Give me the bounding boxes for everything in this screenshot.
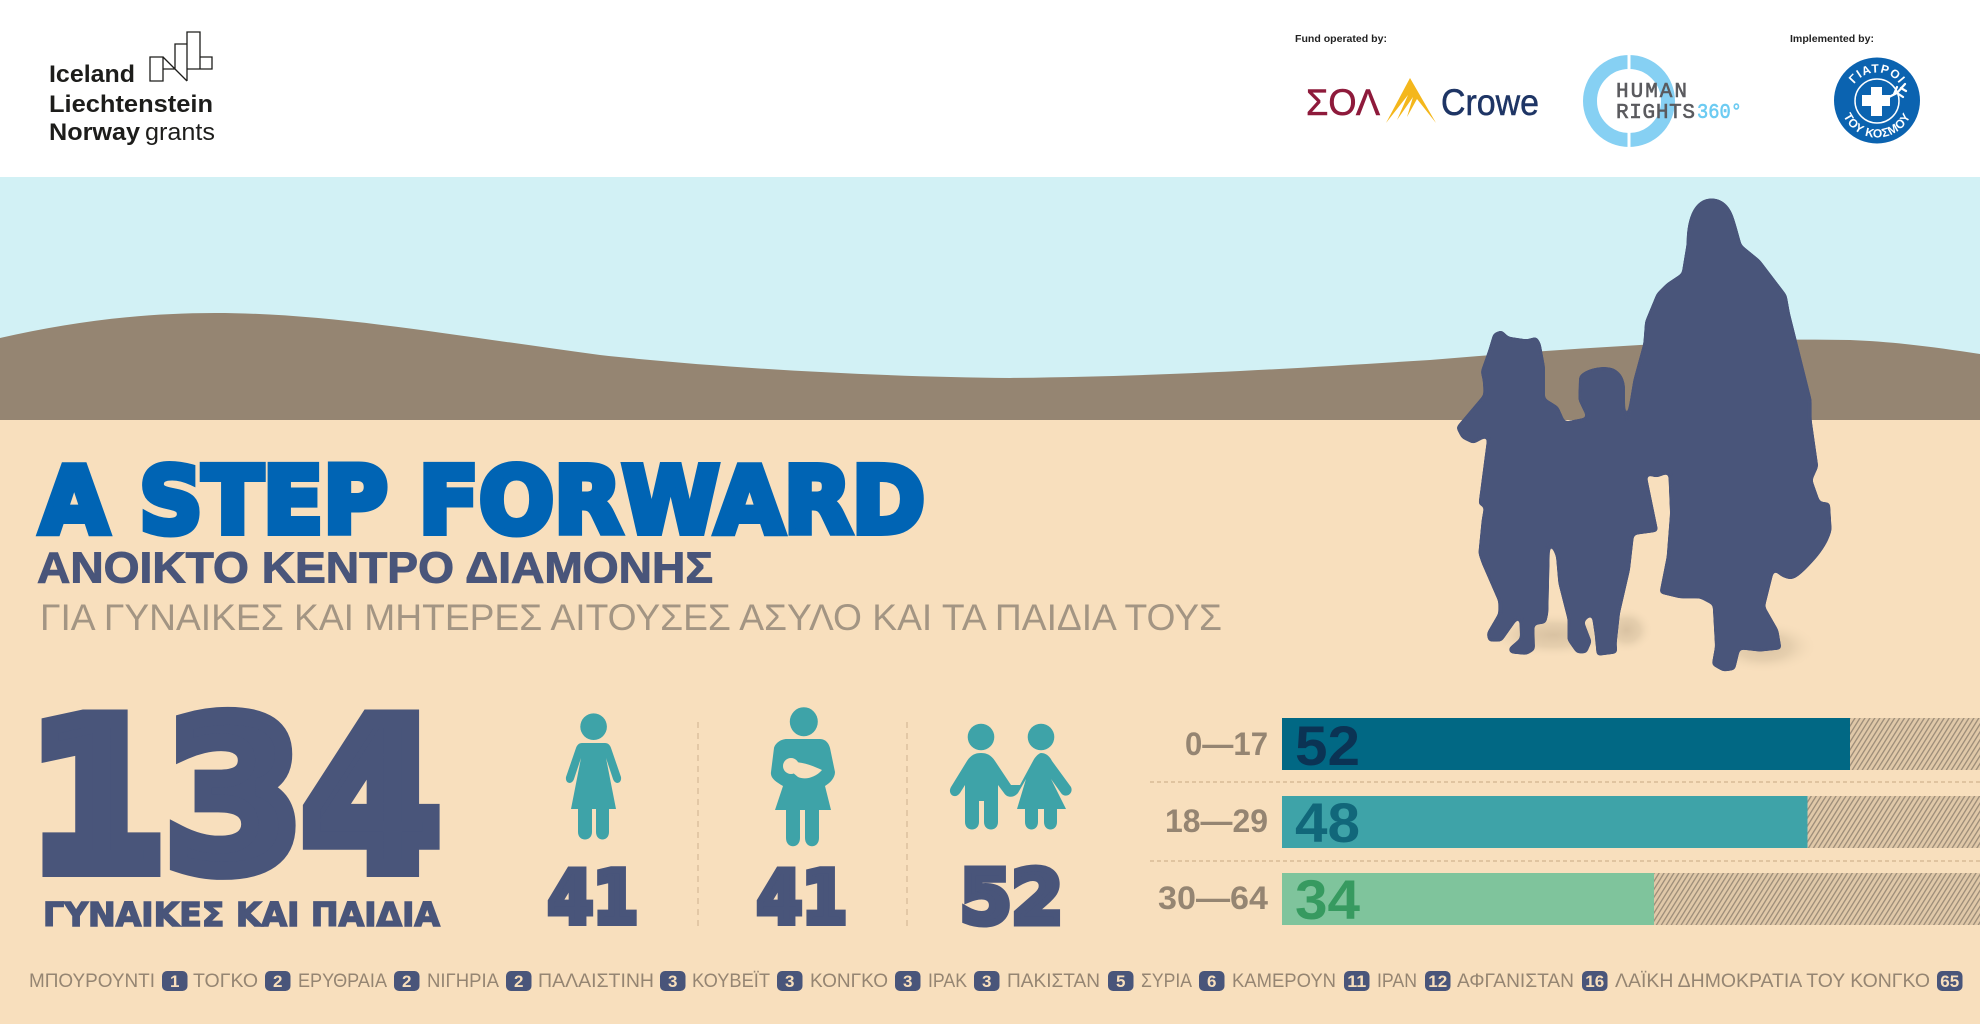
logo: Iceland Liechtenstein Norway grants — [49, 32, 215, 146]
logo: Human Rights 360: RIGHTS — [1616, 102, 1695, 125]
background: sand ground — [0, 420, 1980, 1024]
bar: 0-17: 52 — [1295, 714, 1360, 777]
footer: countries of origin: ΑΦΓΑΝΙΣΤΑΝ — [1457, 971, 1574, 992]
logo: SOL Crowe — [1306, 78, 1539, 123]
logo: Iceland Liechtenstein Norway grants: Iceland — [49, 61, 135, 88]
logo: Doctors of the World: ΓΙΑΤΡΟΙ — [1848, 64, 1905, 84]
bar: 0-17 — [1185, 714, 1980, 777]
footer: countries of origin: ΤΟΓΚΟ — [193, 971, 258, 992]
logo: Iceland Liechtenstein Norway grants: Norway — [49, 119, 141, 146]
big number: 134 total: 134 — [28, 679, 440, 917]
footer: countries of origin: 2 — [402, 972, 411, 991]
bar: 0-17: 0—17 — [1185, 726, 1268, 762]
footer: countries of origin: ΙΡΑΝ — [1377, 971, 1417, 992]
footer: countries of origin: ΠΑΛΑΙΣΤΙΝΗ — [538, 971, 654, 992]
illustration: mother and two children silhouette — [1456, 198, 1832, 673]
logo: Human Rights 360: 360° — [1697, 102, 1742, 125]
label: fund operated by: Fund operated by: — [1295, 33, 1387, 45]
footer: countries of origin: 2 — [273, 972, 282, 991]
logo: Iceland Liechtenstein Norway grants: grants — [145, 119, 215, 146]
bar: 30-64 — [1158, 868, 1980, 931]
footer: countries of origin: 2 — [514, 972, 523, 991]
stat: children 52: 52 — [960, 855, 1063, 941]
footer: countries of origin: ΣΥΡΙΑ — [1141, 971, 1192, 992]
logo: SOL Crowe: Crowe — [1441, 82, 1539, 123]
footer: countries of origin: 3 — [982, 972, 991, 991]
subtitle: open accommodation centre: ΑΝΟΙΚΤΟ ΚΕΝΤΡΟ ΔΙΑΜΟΝΗΣ — [37, 544, 713, 592]
label: implemented by: Implemented by: — [1790, 33, 1874, 45]
bar: 30-64: 34 — [1295, 868, 1360, 931]
bar: 18-29 — [1165, 791, 1980, 854]
icon: two children holding hands — [950, 724, 1072, 830]
footer: countries of origin: ΜΠΟΥΡΟΥΝΤΙ — [29, 971, 155, 992]
footer: countries of origin: 16 — [1585, 972, 1604, 991]
stat: women 41: 41 — [548, 856, 638, 940]
footer: countries of origin: ΚΟΥΒΕΪΤ — [692, 971, 770, 992]
logo: Human Rights 360: HUMAN — [1616, 81, 1687, 104]
footer: countries of origin: ΕΡΥΘΡΑΙΑ — [298, 971, 387, 992]
footer: countries of origin: ΝΙΓΗΡΙΑ — [427, 971, 499, 992]
footer: countries of origin: 3 — [785, 972, 794, 991]
header band — [0, 0, 1980, 177]
logo: Human Rights 360 — [1590, 50, 1742, 152]
footer: countries of origin: 3 — [668, 972, 677, 991]
footer: countries of origin: ΚΟΝΓΚΟ — [810, 971, 888, 992]
bar: 18-29: 48 — [1295, 791, 1360, 854]
footer: countries of origin: 5 — [1116, 972, 1125, 991]
logo: Doctors of the World — [1834, 58, 1920, 144]
footer: countries of origin: 11 — [1347, 972, 1366, 991]
background: hill — [0, 313, 1980, 421]
footer: countries of origin: 6 — [1207, 972, 1216, 991]
icon: mother holding baby — [771, 707, 835, 846]
footer: countries of origin: ΙΡΑΚ — [928, 971, 967, 992]
footer: countries of origin: ΛΑΪΚΗ ΔΗΜΟΚΡΑΤΙΑ ΤΟΥ ΚΟΝΓΚΟ — [1615, 971, 1930, 992]
logo: Doctors of the World: ΤΟΥ ΚΟΣΜΟΥ — [1844, 112, 1909, 138]
footer: countries of origin: ΚΑΜΕΡΟΥΝ — [1232, 971, 1336, 992]
footer: countries of origin: 65 — [1940, 972, 1959, 991]
subtitle: target group: ΓΙΑ ΓΥΝΑΙΚΕΣ ΚΑΙ ΜΗΤΕΡΕΣ ΑΙΤΟΥΣΕΣ ΑΣΥΛΟ ΚΑΙ ΤΑ ΠΑΙΔΙΑ ΤΟΥΣ — [40, 597, 1222, 638]
footer: countries of origin: 1 — [170, 972, 179, 991]
title: A STEP FORWARD: A STEP FORWARD — [40, 448, 925, 554]
footer: countries of origin: 3 — [903, 972, 912, 991]
bar chart: age groups — [1150, 714, 1980, 931]
label: women and children: ΓΥΝΑΙΚΕΣ ΚΑΙ ΠΑΙΔΙΑ — [43, 896, 440, 934]
footer: countries of origin — [29, 971, 1962, 992]
icon: woman — [566, 713, 621, 840]
bar: 30-64: 30—64 — [1158, 880, 1268, 916]
logo: Iceland Liechtenstein Norway grants: Liechtenstein — [49, 91, 213, 118]
background: sky — [0, 177, 1980, 420]
logo: SOL Crowe: ΣΟΛ — [1306, 82, 1380, 123]
footer: countries of origin: ΠΑΚΙΣΤΑΝ — [1007, 971, 1100, 992]
stat: mothers 41: 41 — [757, 856, 847, 940]
footer: countries of origin: 12 — [1428, 972, 1447, 991]
bar: 18-29: 18—29 — [1165, 803, 1268, 839]
